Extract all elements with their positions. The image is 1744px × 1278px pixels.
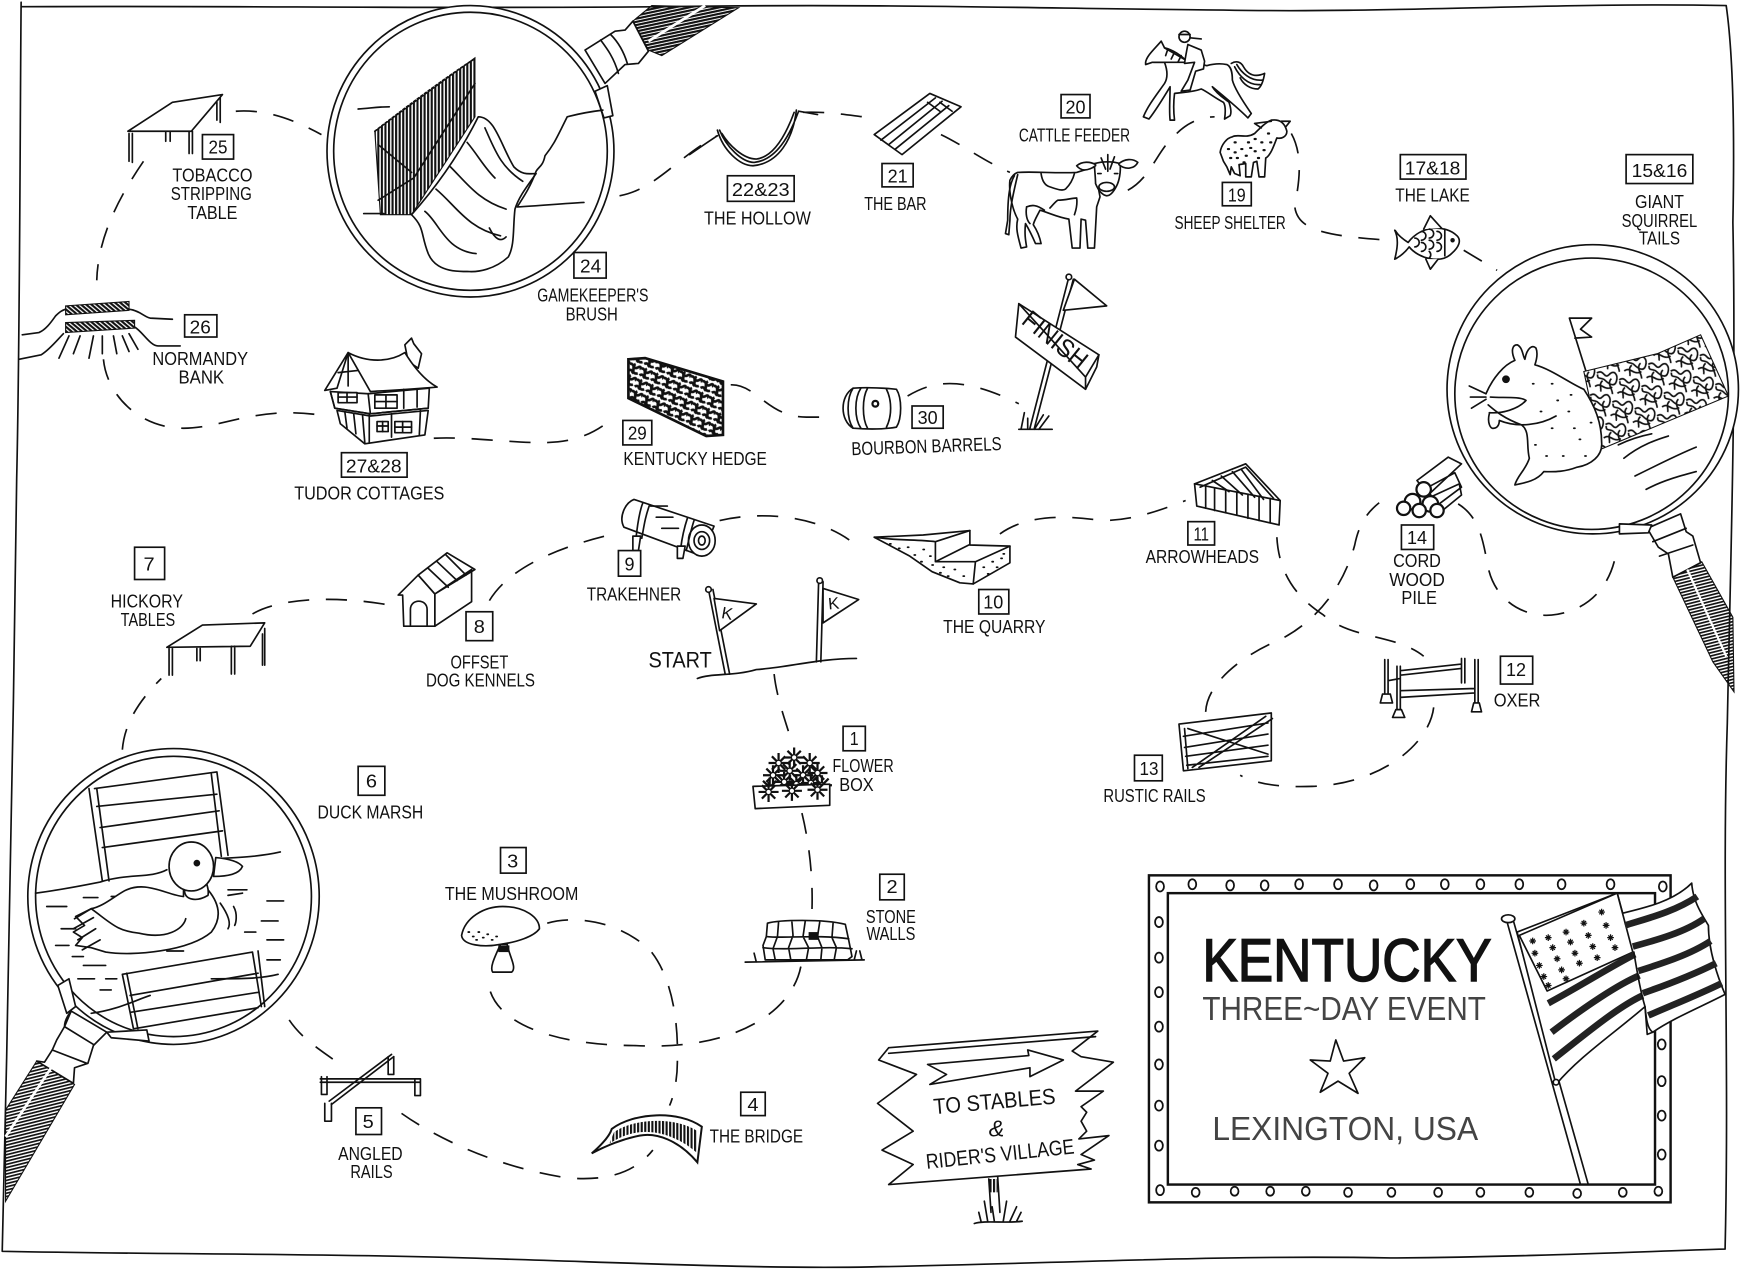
label 10: THE QUARRY <box>943 617 1046 638</box>
label 13: 13 <box>1139 759 1158 780</box>
label 19: SHEEP SHELTER <box>1175 213 1286 234</box>
subtitle: three-day event: THREE~DAY EVENT <box>1202 991 1486 1028</box>
tail log with flag <box>1569 318 1728 489</box>
icon: bar <box>874 93 961 155</box>
label 26: 26 <box>190 318 211 339</box>
obstacle 24 label: gamekeeper's brush <box>537 252 648 325</box>
obstacle 15 and 16 label: giant squirrel tails: 15&16 <box>1632 161 1687 182</box>
label 17&18: THE LAKE <box>1395 185 1470 206</box>
label 25: TOBACCO <box>172 165 252 186</box>
icon: bridge <box>592 1115 702 1162</box>
label 7 <box>111 547 183 631</box>
label 5: RAILS <box>350 1162 393 1183</box>
obstacle 6 label: duck marsh: DUCK MARSH <box>318 803 423 824</box>
label 14: PILE <box>1401 588 1437 609</box>
label 25: 25 <box>209 138 227 159</box>
label 26: BANK <box>179 368 224 389</box>
icon: bank <box>19 301 180 359</box>
label 22&23: THE HOLLOW <box>704 209 811 230</box>
label 19 <box>1175 182 1286 234</box>
label 12: OXER <box>1494 690 1540 711</box>
magnifying glass: gamekeeper's brush <box>327 6 739 297</box>
icon: quarry <box>874 531 1010 584</box>
icon: star <box>1310 1040 1365 1093</box>
label 3: THE MUSHROOM <box>445 884 578 905</box>
label 8: DOG KENNELS <box>426 670 535 691</box>
label 21: 21 <box>888 166 908 187</box>
label 3: 3 <box>507 852 518 873</box>
location: Lexington, USA: LEXINGTON, USA <box>1212 1111 1479 1148</box>
label 5: ANGLED <box>338 1144 403 1165</box>
obstacle 4: the bridge <box>592 1092 803 1162</box>
label 7: HICKORY <box>111 591 183 612</box>
arrow <box>928 1050 1063 1084</box>
water <box>36 852 280 1013</box>
start line with K flags: K <box>720 603 734 624</box>
label 26 <box>152 315 248 389</box>
upper fence <box>89 772 228 881</box>
label 1: 1 <box>850 729 859 750</box>
label 8 <box>426 612 535 691</box>
label 8: 8 <box>474 617 485 638</box>
label 2: STONE <box>866 907 916 928</box>
obstacle 15 and 16 label: giant squirrel tails: TAILS <box>1639 229 1680 250</box>
obstacle 15 and 16 label: giant squirrel tails <box>1622 155 1697 250</box>
start line with K flags <box>648 578 859 678</box>
icon: hedge <box>628 358 723 436</box>
obstacle 11: arrowheads <box>1146 464 1280 568</box>
icon: arrowhead <box>1195 464 1280 525</box>
sign: to stables and rider's village: & <box>989 1116 1004 1142</box>
obstacle 17 and 18: the lake <box>1395 155 1470 269</box>
label 29: 29 <box>628 423 647 444</box>
label 5 <box>338 1108 403 1183</box>
obstacle 22 and 23: the hollow <box>690 110 818 230</box>
panel frame <box>1149 875 1671 1202</box>
magnifying glass: giant squirrel tails <box>1447 245 1738 692</box>
obstacle 8: offset dog kennels <box>398 553 535 691</box>
label 30: BOURBON BARRELS <box>851 434 1002 460</box>
label 4: THE BRIDGE <box>710 1126 803 1147</box>
label 29: KENTUCKY HEDGE <box>623 449 767 470</box>
obstacle 21: the bar <box>864 93 961 215</box>
label 2: 2 <box>886 877 898 898</box>
label 1: FLOWER <box>833 756 894 777</box>
label 25: STRIPPING <box>171 184 252 205</box>
icon: fish <box>1395 216 1459 269</box>
obstacle 3: the mushroom <box>445 848 578 972</box>
title panel <box>1149 875 1725 1202</box>
icon: flower box <box>753 747 832 809</box>
label 12 <box>1494 656 1540 711</box>
squirrel <box>1469 345 1602 485</box>
icon: barrel <box>843 388 901 429</box>
icon: kennel <box>398 553 475 626</box>
label 4: 4 <box>747 1095 759 1116</box>
obstacle 10: the quarry <box>874 531 1046 638</box>
icon: table <box>128 95 222 162</box>
icon: cottage <box>325 338 437 444</box>
obstacle 15 and 16 label: giant squirrel tails: SQUIRREL <box>1622 211 1697 232</box>
water ditch <box>412 117 536 272</box>
label 29 <box>623 420 767 470</box>
obstacle 29: kentucky hedge <box>623 358 767 470</box>
obstacle 24 label: gamekeeper's brush: 24 <box>580 257 601 278</box>
label 20 <box>1019 95 1130 146</box>
dashed course route <box>97 111 1617 1179</box>
label 2: WALLS <box>866 924 915 945</box>
duck <box>73 842 242 954</box>
label 9: 9 <box>625 555 635 576</box>
label 22&23 <box>704 176 811 230</box>
sign: to stables and rider's village <box>878 1031 1113 1223</box>
obstacle 2: stone walls <box>745 874 916 962</box>
label 21: THE BAR <box>864 194 926 215</box>
icon: mushroom <box>462 906 539 972</box>
label 30 <box>851 406 1002 460</box>
icon: American flag <box>1502 883 1725 1185</box>
obstacle 24 label: gamekeeper's brush: BRUSH <box>566 304 618 325</box>
icon: hollow <box>690 110 818 166</box>
label 9: TRAKEHNER <box>587 585 681 606</box>
start line with K flags: START <box>648 647 712 672</box>
obstacle 26: normandy bank <box>19 301 248 389</box>
label 2 <box>866 874 916 945</box>
label 14 <box>1389 525 1445 609</box>
label 22&23: 22&23 <box>732 180 790 201</box>
label 11: 11 <box>1193 525 1209 546</box>
label 21 <box>864 164 926 215</box>
sign: to stables and rider's village: TO STABLES <box>932 1084 1056 1119</box>
obstacle 1: flower box <box>753 726 894 809</box>
icon: angled rails <box>320 1054 420 1121</box>
icon: horse and rider <box>1143 31 1265 120</box>
label 7: TABLES <box>121 610 175 631</box>
icon: cow <box>1005 155 1138 248</box>
label 10 <box>943 590 1046 638</box>
sign: to stables and rider's village: RIDER'S VILLAGE <box>925 1135 1075 1174</box>
label 9 <box>587 551 681 606</box>
obstacle 5: angled rails <box>320 1054 420 1183</box>
label 1: BOX <box>839 775 874 796</box>
obstacle 14: cord wood pile <box>1389 457 1461 609</box>
label 3 <box>445 848 578 905</box>
obstacle 27 and 28: tudor cottages <box>294 338 444 504</box>
title: Kentucky: KENTUCKY <box>1202 927 1492 994</box>
label 11: ARROWHEADS <box>1146 547 1259 568</box>
obstacle 7: hickory tables <box>111 547 265 675</box>
magnifying glass: duck marsh <box>6 749 319 1201</box>
label 27&28: 27&28 <box>346 457 402 478</box>
lower fence <box>122 951 265 1029</box>
label 17&18: 17&18 <box>1405 159 1460 180</box>
label 20: 20 <box>1066 97 1086 118</box>
icon: oxer fence <box>1380 658 1482 717</box>
start line with K flags: K <box>827 594 840 614</box>
obstacle 30: bourbon barrels <box>843 388 1002 460</box>
label 10: 10 <box>983 592 1003 613</box>
brush fence <box>375 58 475 215</box>
label 25: TABLE <box>187 203 237 224</box>
icon: stone wall <box>745 920 864 962</box>
label 20: CATTLE FEEDER <box>1019 125 1130 146</box>
icon: sheep <box>1220 120 1290 177</box>
obstacle 6 label: duck marsh: 6 <box>366 771 377 792</box>
label 13: RUSTIC RAILS <box>1103 786 1206 807</box>
label 7: 7 <box>143 555 155 576</box>
label 14: WOOD <box>1389 570 1445 591</box>
obstacle 19: sheep shelter <box>1175 120 1290 234</box>
label 14: 14 <box>1407 528 1427 549</box>
label 14: CORD <box>1393 551 1441 572</box>
obstacle 15 and 16 label: giant squirrel tails: GIANT <box>1635 192 1684 213</box>
obstacle 20: cattle feeder <box>1005 95 1138 248</box>
icon: table <box>167 623 265 675</box>
label 13 <box>1103 755 1206 807</box>
label 17&18 <box>1395 155 1470 206</box>
label 30: 30 <box>918 408 938 429</box>
label 19: 19 <box>1228 185 1246 206</box>
icon: log <box>622 499 715 558</box>
icon: log pile <box>1397 457 1461 517</box>
obstacle 24 label: gamekeeper's brush: GAMEKEEPER'S <box>537 285 648 306</box>
obstacle 13: rustic rails <box>1103 713 1272 807</box>
obstacle 6 label: duck marsh <box>318 766 423 824</box>
obstacle 9: trakehner <box>587 499 715 606</box>
label 27&28: TUDOR COTTAGES <box>294 483 444 504</box>
label 12: 12 <box>1506 660 1526 681</box>
label 27&28 <box>294 453 444 504</box>
finish sign with flag <box>1015 274 1107 429</box>
label 26: NORMANDY <box>152 349 248 370</box>
label 4 <box>710 1092 803 1147</box>
label 1 <box>833 726 894 796</box>
icon: gate <box>1179 713 1272 771</box>
obstacle 12: oxer <box>1380 656 1540 717</box>
label 25 <box>171 135 252 224</box>
label 5: 5 <box>363 1112 374 1133</box>
label 11 <box>1146 522 1259 568</box>
obstacle 25: tobacco stripping table <box>128 95 252 224</box>
label 8: OFFSET <box>450 652 509 673</box>
finish sign with flag: FINISH <box>1017 306 1093 375</box>
